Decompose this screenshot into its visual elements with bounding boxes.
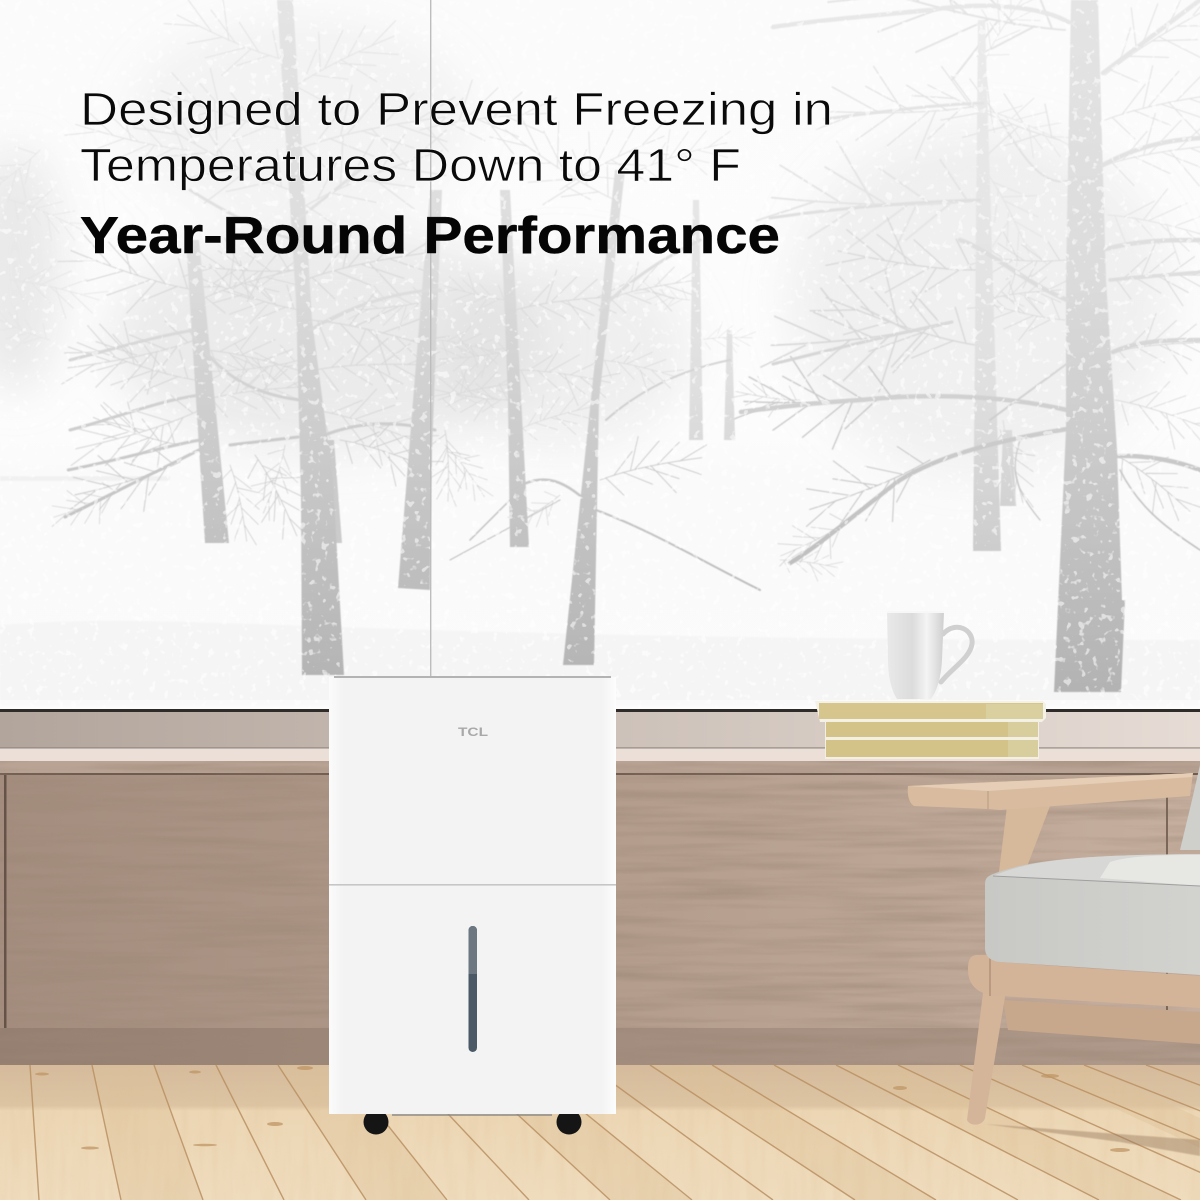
tree: far background pair bbox=[689, 200, 735, 440]
brand logo: TCL bbox=[458, 727, 488, 739]
mist around branches bbox=[0, 20, 1170, 470]
back cushion bbox=[1180, 765, 1200, 850]
window frame line bbox=[0, 709, 1200, 712]
tree: background right bbox=[973, 20, 1016, 551]
icon: coffee mug bbox=[887, 611, 972, 699]
twigs: mid bbox=[49, 205, 1200, 495]
subtitle line 2: Temperatures Down to 41° F bbox=[80, 139, 741, 191]
mug body bbox=[887, 612, 944, 699]
seat frame rear rail bbox=[1003, 1000, 1200, 1044]
floor planks bbox=[30, 1065, 1200, 1200]
seat cushion bbox=[985, 854, 1200, 975]
sill bbox=[0, 712, 1200, 748]
water level window bbox=[468, 926, 477, 1052]
armchair bbox=[908, 765, 1200, 1125]
fine twig clusters bbox=[0, 0, 1200, 583]
text block: heading bbox=[80, 83, 833, 265]
panel: snowy window view bbox=[0, 0, 1200, 712]
twigs: pale upper bbox=[0, 0, 1200, 359]
tree: left background bbox=[186, 240, 229, 543]
books bbox=[815, 701, 1046, 759]
wheel left bbox=[364, 1110, 388, 1134]
limbs bbox=[65, 0, 1200, 590]
wood band bbox=[0, 761, 1200, 775]
chair arm bbox=[908, 773, 1193, 810]
panel: window sill and wood wall bbox=[0, 709, 1200, 1065]
snowy ground shading bbox=[0, 476, 1200, 706]
subtitle line 1: Designed to Prevent Freezing in bbox=[80, 83, 833, 135]
tree: left centre large bbox=[277, 0, 344, 675]
window mullion bbox=[430, 0, 431, 680]
title: Year-Round Performance bbox=[80, 207, 780, 265]
tank seam bbox=[329, 884, 616, 886]
tree: centre bbox=[398, 190, 529, 590]
book: top bbox=[815, 701, 1046, 722]
wood grain bbox=[0, 761, 1200, 1065]
mug handle bbox=[941, 627, 972, 682]
book: bottom bbox=[825, 738, 1039, 759]
dehumidifier bbox=[329, 676, 616, 1134]
tree: behind left centre bbox=[326, 440, 342, 543]
chair shadow bbox=[985, 1124, 1200, 1156]
twigs: darker lower bbox=[41, 347, 1200, 583]
upper chair leg bbox=[998, 806, 1050, 880]
trees bbox=[65, 0, 1200, 692]
seat frame front rail bbox=[968, 955, 1200, 1008]
underside bbox=[392, 1114, 552, 1116]
tree: big right bbox=[1054, 0, 1125, 692]
plinth bbox=[0, 1028, 1200, 1065]
wood panel bbox=[0, 775, 1200, 1028]
front chair leg bbox=[967, 985, 1007, 1125]
book: middle bbox=[825, 721, 1039, 739]
floor knots bbox=[35, 1066, 1130, 1152]
alternate plank tones bbox=[92, 1065, 1200, 1200]
ledge highlight bbox=[0, 749, 1200, 761]
wheel right bbox=[556, 1110, 582, 1134]
falling snow speckle on trunks bbox=[0, 0, 1200, 708]
panel: wooden floor bbox=[0, 1065, 1200, 1200]
tree: centre right bbox=[563, 170, 625, 665]
body bbox=[329, 677, 616, 1114]
